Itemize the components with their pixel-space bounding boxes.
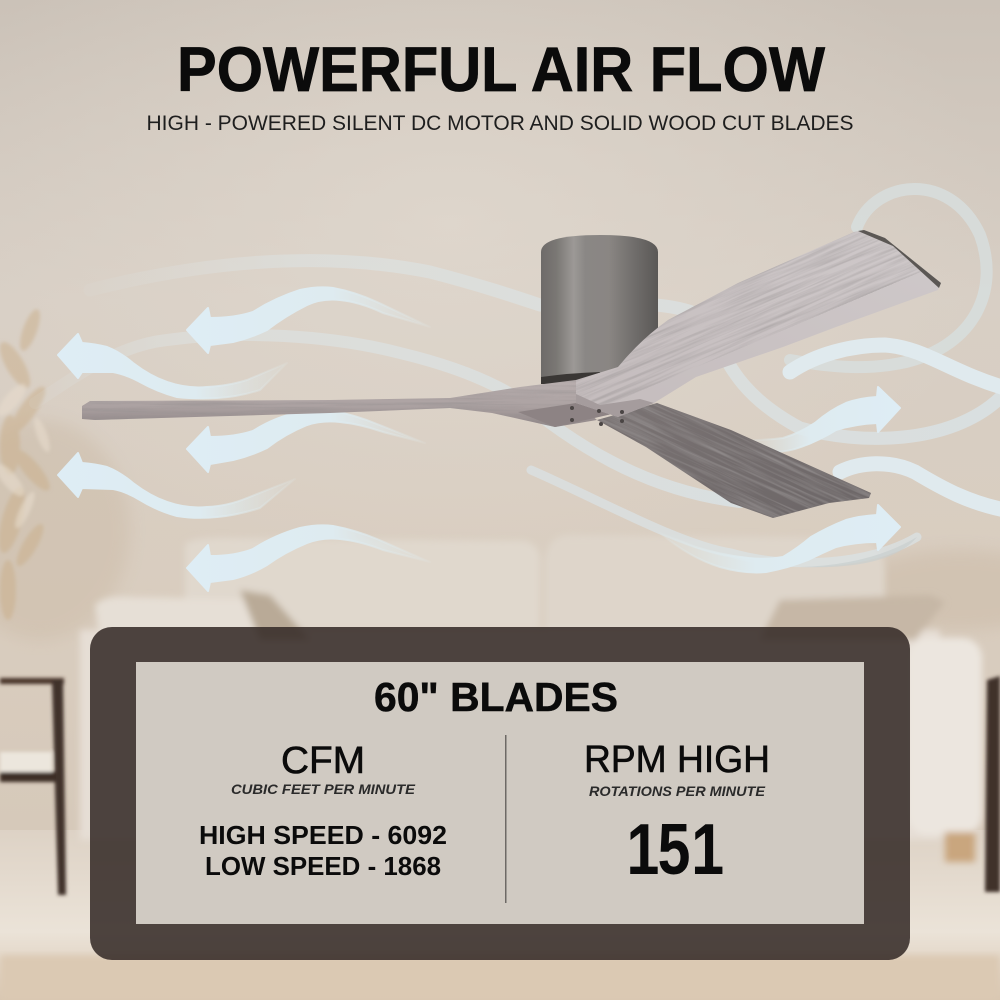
low speed value: LOW SPEED - 1868 [205,851,441,881]
swirl: ripple under right arrow [800,537,917,567]
blade: left [82,380,610,427]
blade: upper right [576,230,941,417]
arrow: left 4 [58,453,295,518]
arrow: right 2 [660,505,900,572]
motor housing [541,235,658,384]
pampas grass decoration [0,307,55,620]
swirl: lower wave [531,470,917,563]
high speed value: HIGH SPEED - 6092 [199,820,447,850]
chair right [985,676,1000,892]
arrow: left 2 [58,334,287,398]
hub screws [570,406,624,426]
sofa [80,535,982,862]
swirl: right wave 2 [840,464,1000,510]
spec panel [90,627,910,960]
panel: inner card [136,662,864,924]
CFM subtitle: CUBIC FEET PER MINUTE [231,781,416,797]
title: POWERFUL AIR FLOW [177,35,825,105]
column divider [505,735,506,903]
arrow: left 5 [187,525,430,591]
arrow: right 1 [752,387,900,452]
panel: dark frame [90,627,910,960]
chair left [0,678,66,895]
swirl: loop [790,189,987,367]
CFM heading: CFM [281,740,365,782]
ceiling fan [82,230,941,518]
heading: blades: 60" BLADES [374,674,618,720]
swirl: middle wave [35,335,740,502]
arrow: left 1 [187,287,430,353]
swirl: upper wave [90,261,1000,438]
swirl: right wave 1 [790,345,1000,388]
subtitle: HIGH - POWERED SILENT DC MOTOR AND SOLID WOOD CUT BLADES [146,112,854,135]
column: RPM [584,739,770,889]
column: CFM [199,740,447,881]
arrow: left 3 [187,410,425,472]
RPM subtitle: ROTATIONS PER MINUTE [589,783,766,799]
RPM heading: RPM HIGH [584,739,770,781]
RPM value: 151 [626,808,724,889]
air flow swirls [35,189,1000,563]
blade: lower right [597,403,871,518]
